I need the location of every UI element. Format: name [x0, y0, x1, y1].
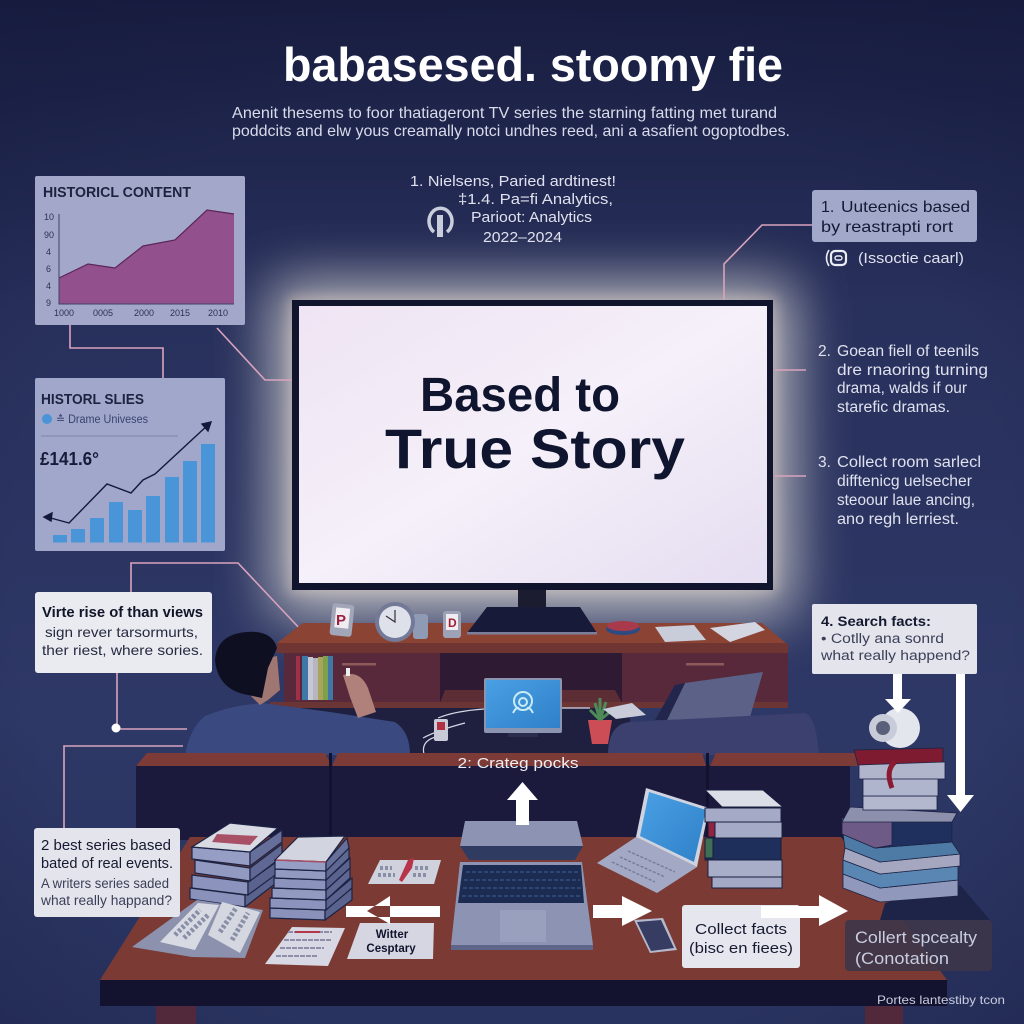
- panel: best series note: what really happand?: [40, 893, 172, 908]
- right note 2: dre rnaoring turning: [837, 362, 988, 379]
- legend: ≛ Drame Univeses: [56, 412, 148, 426]
- panel: top right note: 1.: [821, 199, 834, 216]
- area chart: [59, 210, 234, 304]
- panel: search facts: what really happend?: [820, 648, 970, 663]
- arrow up: [507, 782, 538, 825]
- arrow right to phone: [593, 896, 652, 926]
- right note 2: Goean fiell of teenils: [837, 343, 979, 360]
- stack shadow: [880, 885, 990, 920]
- console items: phones and clock: [329, 602, 461, 642]
- chart axis labels: 4: [46, 281, 51, 291]
- chart axis labels: 9: [46, 298, 51, 308]
- footer credit: Portes lantestiby tcon: [877, 993, 1005, 1007]
- stat value: £141.6°: [40, 449, 99, 469]
- note: witter cesptary: Witter: [376, 929, 409, 941]
- source note top center: [410, 173, 616, 246]
- tv headline: [385, 369, 685, 480]
- connector dot: [112, 724, 120, 732]
- console items: phones and clock: P: [336, 612, 346, 629]
- title: babasesed. stoomy fie: [283, 38, 783, 91]
- note: witter cesptary: Cesptary: [366, 943, 416, 955]
- panel: best series note: [34, 828, 180, 917]
- arrow left: [346, 896, 440, 924]
- tv console: [270, 600, 788, 708]
- chart axis labels: 4: [46, 247, 51, 257]
- tv headline: True Story: [385, 417, 685, 480]
- center laptop: [451, 821, 593, 950]
- heading: historl slies: HISTORL SLIES: [41, 392, 144, 408]
- table: [100, 837, 947, 1024]
- phone: [634, 918, 677, 953]
- right note 3: [818, 454, 981, 528]
- panel: historical content chart: [35, 176, 245, 325]
- potted plant: [588, 698, 646, 744]
- tv glow: [272, 282, 794, 617]
- panel: top right note: by reastrapti rort: [821, 219, 954, 236]
- caption with icon: (Issoctie caarl): [858, 250, 964, 267]
- source note top center: Parioot: Analytics: [471, 209, 592, 226]
- chart axis labels: [44, 212, 228, 318]
- right note 3: difftenicg uelsecher: [837, 473, 972, 490]
- chart axis labels: 10: [44, 212, 54, 222]
- panel: best series note: A writers series saded: [41, 876, 169, 891]
- icon: person arch: [513, 692, 533, 713]
- arrow down to books: [947, 674, 974, 812]
- cable and device: [423, 708, 590, 754]
- arrow right over panel: [761, 895, 848, 926]
- tv stand base: [467, 600, 597, 634]
- panel: collect specialty: [845, 920, 992, 971]
- chart axis labels: 90: [44, 230, 54, 240]
- right note 3: steoour laue ancing,: [837, 492, 975, 509]
- panel: best series note: bated of real events.: [41, 856, 173, 872]
- panel: search facts: [812, 604, 977, 674]
- paper with pen: [368, 858, 441, 884]
- open book: [132, 900, 263, 958]
- console items: phones and clock: D: [448, 616, 457, 630]
- connector lines: [64, 225, 812, 828]
- right note 3: 3.: [818, 454, 831, 471]
- subtitle: [232, 105, 790, 140]
- panel: top right note: [812, 190, 977, 242]
- panel: viewer note: ther riest, where sories.: [42, 642, 203, 658]
- label: crateg pocks: 2: Crateg pocks: [458, 756, 578, 772]
- panel: collect specialty: (Conotation: [855, 950, 949, 968]
- right note 2: starefic dramas.: [837, 399, 950, 416]
- chart axis labels: 0005: [93, 308, 113, 318]
- monitor and desk gadgets: [423, 678, 590, 754]
- person watching tv: [185, 632, 410, 755]
- panel: viewer note: Virte rise of than views: [42, 605, 203, 621]
- subtitle: Anenit thesems to foor thatiageront TV series the starning fatting met turand: [232, 105, 777, 122]
- book stack middle: [270, 836, 352, 920]
- source note top center: ‡1.4. Pa=fi Analytics,: [458, 191, 613, 208]
- paper document: [265, 927, 345, 966]
- source note top center: 2022–2024: [483, 229, 562, 246]
- chart axis labels: 1000: [54, 308, 74, 318]
- panel: top right note: Uuteenics based: [841, 199, 970, 216]
- book stack left: [190, 823, 282, 907]
- panel: best series note: 2 best series based: [41, 838, 171, 854]
- panel: collect specialty: Collert spcealty: [855, 929, 978, 947]
- television: [292, 300, 773, 610]
- blue laptop: [597, 788, 709, 893]
- panel: collect facts: (bisc en fiees): [689, 941, 793, 957]
- armchair: [608, 672, 819, 755]
- bar chart: [53, 444, 215, 542]
- shelf books: [296, 656, 333, 700]
- panel: collect facts: Collect facts: [695, 921, 787, 938]
- book stack far right: [842, 748, 960, 902]
- chart axis labels: 6: [46, 264, 51, 274]
- room floor: [275, 703, 630, 755]
- arrow down to camera: [885, 674, 911, 713]
- sofa: [136, 753, 880, 840]
- right note 2: 2.: [818, 343, 831, 360]
- panel: search facts: • Cotlly ana sonrd: [821, 631, 944, 646]
- camera: [869, 708, 920, 748]
- right note 2: [818, 343, 988, 416]
- panel: viewer note: sign rever tarsormurts,: [45, 624, 198, 640]
- book stack right of laptop: [705, 790, 783, 888]
- console items: tray and papers: [606, 621, 765, 642]
- trend line: [44, 422, 211, 523]
- source note top center: 1. Nielsens, Paried ardtinest!: [410, 173, 616, 190]
- tv headline: Based to: [420, 369, 620, 422]
- right note 3: ano regh lerriest.: [837, 511, 959, 528]
- chart axis labels: 2015: [170, 308, 190, 318]
- right note 2: drama, walds if our: [837, 380, 967, 397]
- panel: search facts: 4. Search facts:: [821, 613, 931, 629]
- panel: viewer note: [35, 592, 212, 673]
- panel: historical sales chart: [35, 378, 225, 551]
- note: witter cesptary: [347, 923, 434, 959]
- icon: podcast pin: [429, 208, 452, 237]
- panel: collect facts: [682, 905, 800, 968]
- right note 3: Collect room sarlecl: [837, 454, 981, 471]
- subtitle: poddcits and elw yous creamally notci undhes reed, ani a asafient ogoptodbes.: [232, 123, 790, 140]
- chart axis labels: 2010: [208, 308, 228, 318]
- heading: historical content: HISTORICL CONTENT: [43, 185, 191, 201]
- chart axis labels: 2000: [134, 308, 154, 318]
